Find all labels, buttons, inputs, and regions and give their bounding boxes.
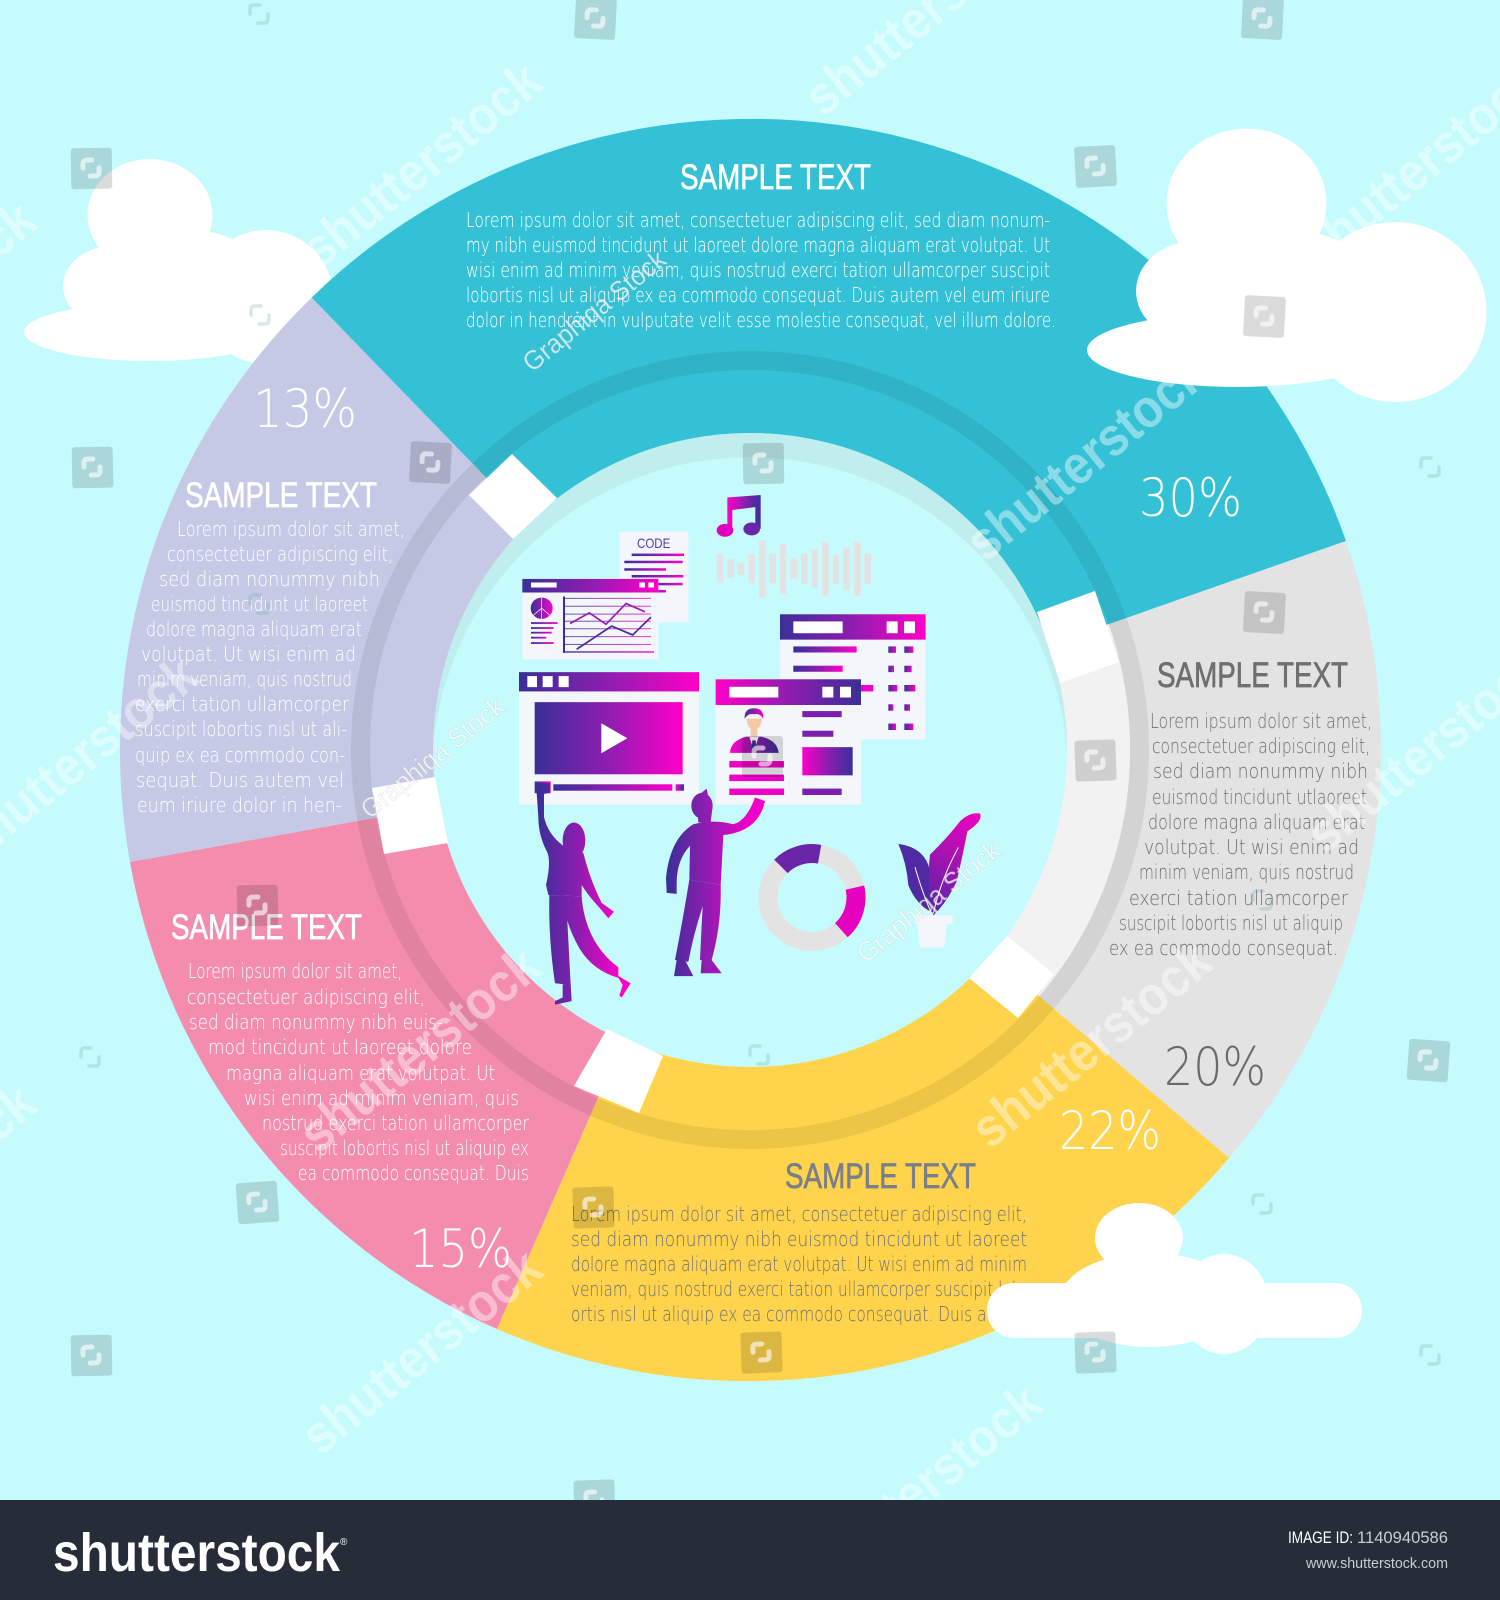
gray body text: minim veniam, quis nostrud — [1139, 860, 1354, 884]
gray body text: euismod tincidunt utlaoreet — [1152, 785, 1367, 809]
yellow body text: veniam, quis nostrud exerci tation ullamcorper suscipit lob- — [571, 1277, 1027, 1301]
lavender body text: suscipit lobortis nisl ut ali- — [135, 717, 347, 741]
watermark: secondary agency text: Graphiqa Stock — [517, 244, 672, 378]
profile window — [716, 679, 861, 805]
blue body text: lobortis nisl ut aliquip ex ea commodo consequat. Duis autem vel eum iriure — [466, 283, 1050, 307]
icon: plant — [898, 813, 981, 947]
lavender body text: quip ex ea commodo con- — [135, 743, 345, 767]
figure: man — [666, 789, 765, 976]
watermark: repeated stock text: shutterstock — [288, 935, 552, 1164]
gray percent: 20% — [1164, 1037, 1266, 1098]
gray body text: consectetuer adipiscing elit, — [1152, 734, 1370, 758]
blue body text: my nibh euismod tincidunt ut laoreet dolore magna aliquam erat volutpat. Ut — [466, 233, 1050, 257]
gray body text: ex ea commodo consequat. — [1109, 936, 1338, 960]
blue percent: 30% — [1139, 468, 1242, 529]
donut chart — [768, 854, 856, 942]
lavender body text: eum iriure dolor in hen- — [137, 793, 342, 817]
watermark: secondary agency text — [355, 244, 1006, 969]
yellow body text — [571, 1202, 1027, 1326]
list window — [780, 614, 926, 739]
footer logo: shutterstock — [53, 1523, 341, 1583]
lavender body text: minim veniam, quis nostrud — [137, 667, 352, 691]
chart window — [522, 579, 658, 659]
lavender sector — [120, 298, 750, 862]
watermark: repeated stock text: shutterstock — [290, 1237, 554, 1466]
pink body text: Lorem ipsum dolor sit amet, — [188, 959, 402, 983]
blue body text: wisi enim ad minim veniam, quis nostrud exerci tation ullamcorper suscipit — [466, 258, 1050, 282]
pink body text: magna aliquam erat volutpat. Ut — [226, 1061, 495, 1085]
gray body text — [1109, 709, 1372, 960]
yellow heading: SAMPLE TEXT — [785, 1157, 976, 1196]
lavender heading: SAMPLE TEXT — [185, 476, 377, 515]
blue body text — [466, 208, 1056, 332]
gray sector — [750, 541, 1381, 1158]
center illustration — [519, 495, 981, 1005]
footer registered mark: ® — [340, 1537, 348, 1548]
lavender body text: Lorem ipsum dolor sit amet, — [177, 517, 405, 541]
footer image number: 1140940586 — [1357, 1528, 1448, 1547]
code document — [619, 531, 688, 622]
yellow body text: sed diam nonummy nibh euismod tincidunt ut laoreet — [571, 1227, 1027, 1251]
gray body text: volutpat. Ut wisi enim ad — [1144, 835, 1359, 859]
lavender body text: euismod tincidunt ut laoreet — [151, 592, 368, 616]
gray body text: sed diam nonummy nibh — [1153, 759, 1368, 783]
panel: yellow 22% — [497, 750, 1229, 1381]
watermark: repeated stock text: shutterstock — [290, 50, 554, 279]
lavender body text: exerci tation ullamcorper — [135, 692, 350, 716]
yellow body text: dolore magna aliquam erat volutpat. Ut wisi enim ad minim — [571, 1252, 1027, 1276]
blue body text: Lorem ipsum dolor sit amet, consectetuer adipiscing elit, sed diam nonum- — [466, 208, 1050, 232]
watermark: secondary agency text: Graphiqa Stock — [355, 691, 510, 825]
lavender body text: consectetuer adipiscing elit, — [167, 542, 393, 566]
pink body text: suscipit lobortis nisl ut aliquip ex — [280, 1136, 529, 1160]
lavender body text — [135, 517, 405, 817]
pink body text: ea commodo consequat. Duis — [298, 1161, 529, 1185]
lavender body text: sed diam nonummy nibh — [159, 567, 380, 591]
yellow percent: 22% — [1059, 1101, 1161, 1162]
gray inner lighter band — [750, 624, 1130, 996]
center circle shaded crescent — [433, 433, 1067, 750]
pink body text: mod tincidunt ut laoreet dolore — [208, 1035, 472, 1059]
blue sector — [312, 119, 1346, 750]
blue heading: SAMPLE TEXT — [680, 158, 871, 197]
watermark: repeated stock text: shutterstock — [960, 930, 1224, 1159]
translucent ring — [360, 360, 1140, 1140]
lavender body text: dolore magna aliquam erat — [146, 617, 362, 641]
center circle — [433, 433, 1067, 1067]
cloud: top right — [1087, 128, 1487, 402]
blue body text: dolor in hendrerit in vulputate velit esse molestie consequat, vel illum dolore. — [466, 308, 1056, 332]
yellow body text: ortis nisl ut aliquip ex ea commodo consequat. Duis autem — [571, 1302, 1027, 1326]
icon: sound wave — [717, 540, 871, 597]
watermark: repeated stock text: shutterstock — [790, 1372, 1054, 1600]
pink body text: nostrud exerci tation ullamcorper — [262, 1111, 530, 1135]
pink heading: SAMPLE TEXT — [171, 908, 362, 947]
gray heading: SAMPLE TEXT — [1157, 656, 1348, 695]
icon: music note — [717, 495, 761, 537]
footer bar — [0, 1500, 1500, 1600]
watermark: repeated stock text: shutterstock — [955, 343, 1219, 572]
yellow body text: Lorem ipsum dolor sit amet, consectetuer adipiscing elit, — [571, 1202, 1027, 1226]
cloud: bottom right — [987, 1203, 1362, 1354]
panel: lavender 13% — [120, 298, 750, 862]
gray body text: exerci tation ullamcorper — [1129, 886, 1349, 910]
pink body text: sed diam nonummy nibh euis- — [189, 1010, 443, 1034]
gray body text: Lorem ipsum dolor sit amet, — [1150, 709, 1372, 733]
gray body text: dolore magna aliquam erat — [1148, 810, 1365, 834]
lavender body text: volutpat. Ut wisi enim ad — [141, 642, 356, 666]
footer url: www.shutterstock.com — [1305, 1555, 1448, 1572]
figure: woman — [536, 783, 631, 1005]
video player window — [519, 672, 699, 805]
watermark: secondary agency text: Graphiqa Stock — [851, 835, 1006, 969]
pink body text — [187, 959, 530, 1185]
yellow sector — [497, 750, 1229, 1381]
code document: CODE — [637, 535, 671, 551]
pink percent: 15% — [409, 1219, 512, 1280]
panel: gray 20% — [750, 541, 1381, 1158]
white gap markers — [372, 454, 1119, 1113]
pink body text: wisi enim ad minim veniam, quis — [244, 1086, 519, 1110]
panel: pink 15% — [130, 750, 750, 1329]
cloud: top left — [24, 159, 333, 364]
gray body text: suscipit lobortis nisl ut aliquip — [1119, 911, 1343, 935]
pink body text: consectetuer adipiscing elit, — [187, 985, 425, 1009]
watermark: small outline marks — [81, 5, 1439, 1364]
pink sector — [130, 750, 750, 1329]
lavender percent: 13% — [253, 379, 357, 440]
panel: blue 30% — [312, 119, 1346, 750]
footer image id: IMAGE ID: — [1288, 1528, 1353, 1547]
lavender body text: sequat. Duis autem vel — [136, 768, 344, 792]
